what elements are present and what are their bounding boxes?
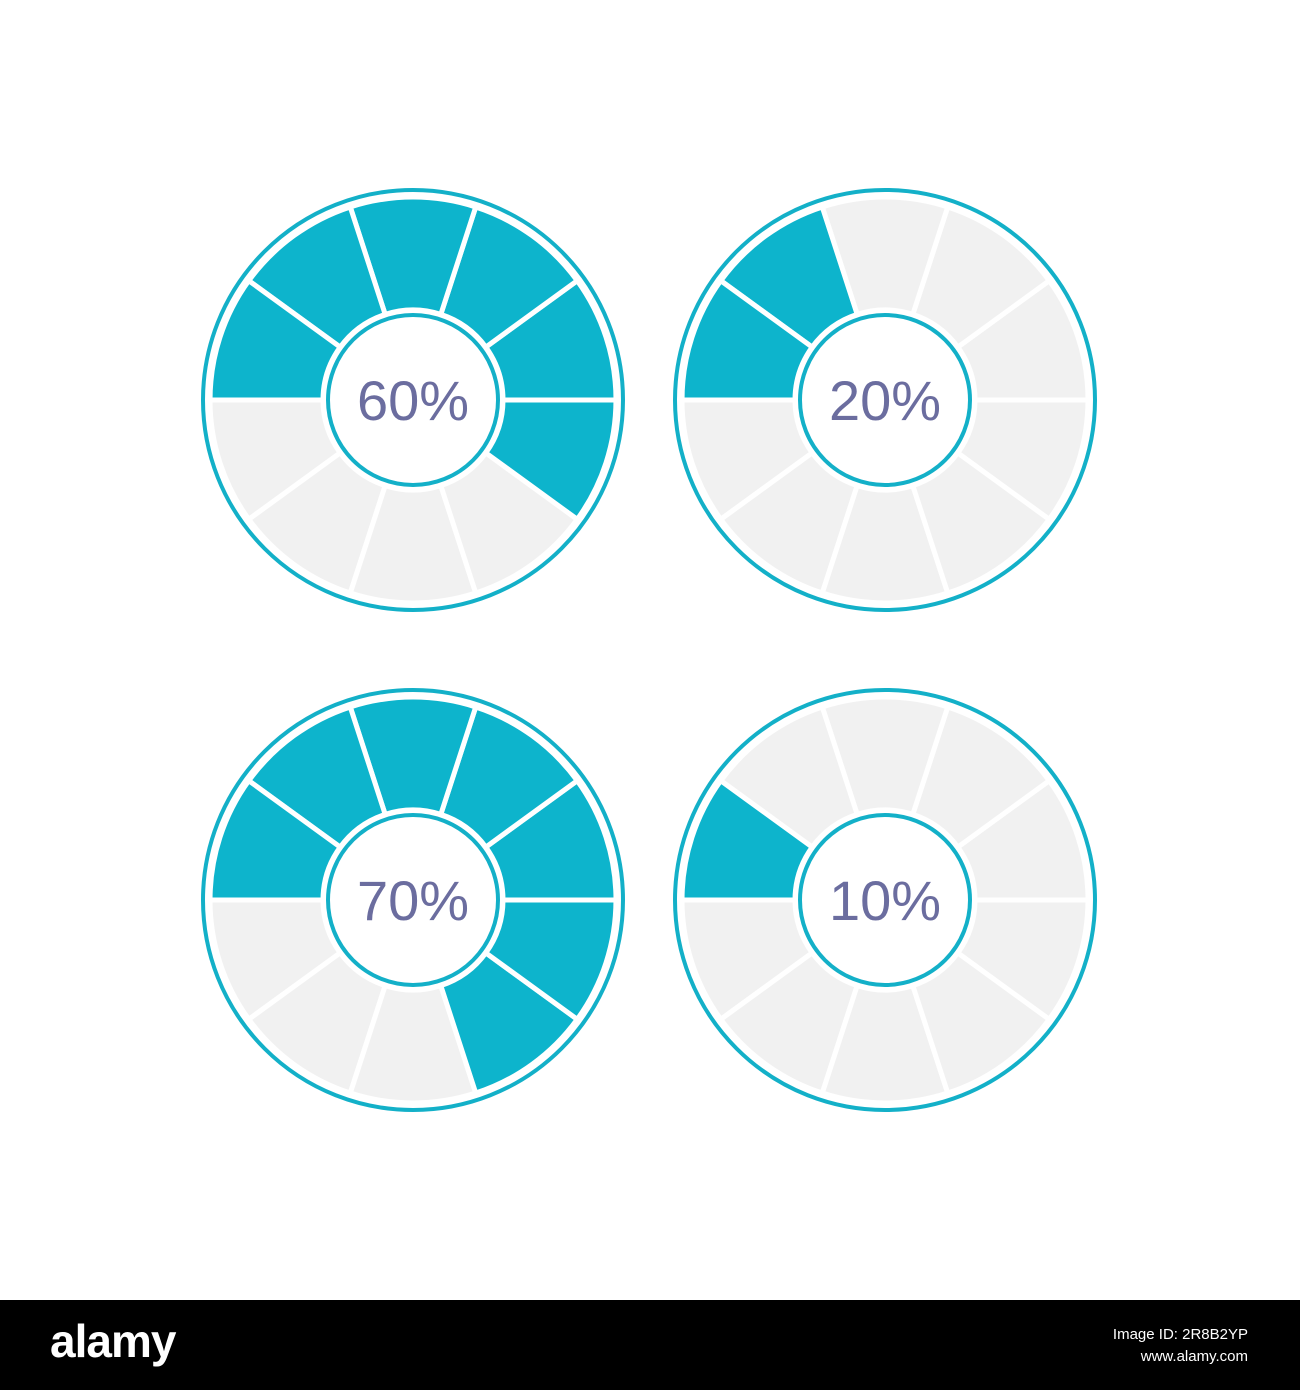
logo text: alamy xyxy=(50,1315,175,1367)
chart: 10% gauge xyxy=(651,670,1119,1130)
image id text: Image ID: 2R8B2YP xyxy=(1113,1326,1248,1343)
chart: 70% gauge: 70% xyxy=(357,869,469,932)
chart: 60% gauge: 60% xyxy=(357,369,469,432)
footer bar xyxy=(0,1300,1300,1390)
chart: 10% gauge: 10% xyxy=(829,869,941,932)
image id text: www.alamy.com xyxy=(1141,1348,1248,1365)
chart: 20% gauge xyxy=(651,170,1119,630)
chart: 20% gauge: 20% xyxy=(829,369,941,432)
chart: 70% gauge xyxy=(179,670,647,1130)
image id text xyxy=(1113,1326,1248,1365)
chart: 60% gauge xyxy=(179,170,647,630)
